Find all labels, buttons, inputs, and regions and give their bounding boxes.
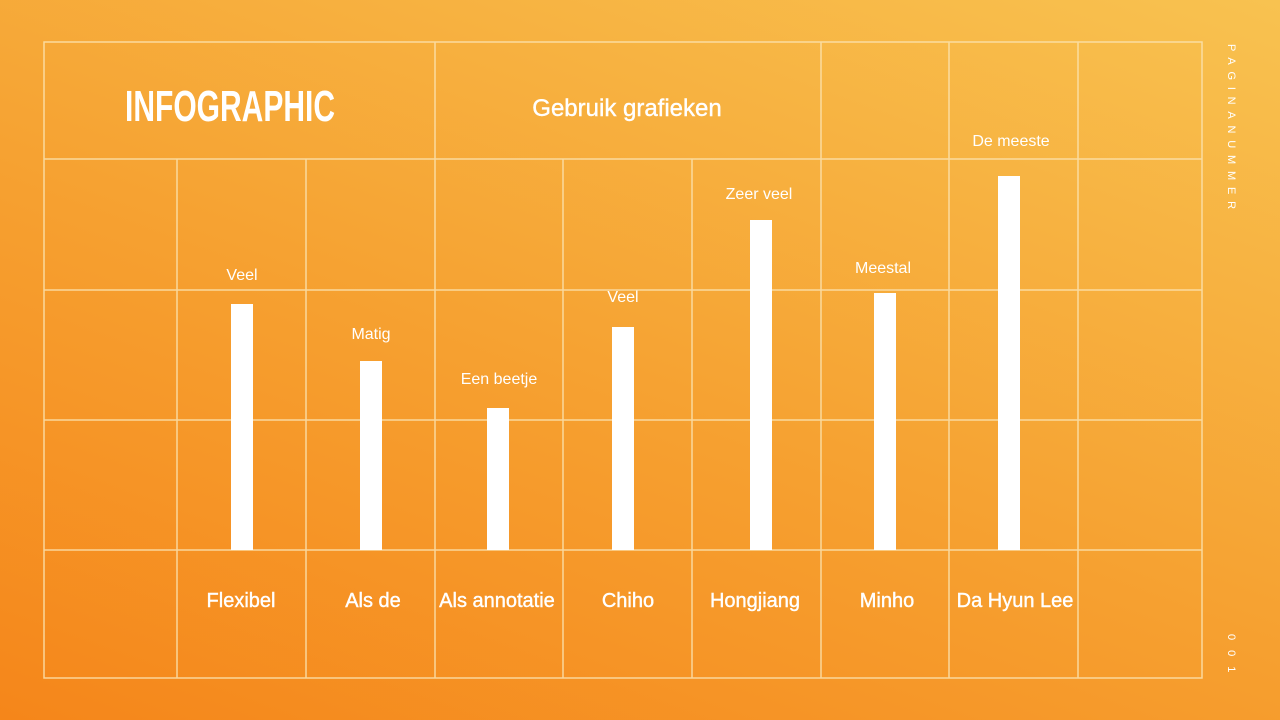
value labels [226, 133, 1050, 388]
title: INFOGRAPHIC [125, 82, 335, 131]
category labels [207, 590, 1073, 612]
category labels: Chiho [602, 590, 654, 612]
value labels: De meeste [972, 133, 1050, 150]
value labels: Veel [607, 289, 639, 306]
category labels: Als annotatie [439, 590, 555, 612]
bars [231, 176, 1020, 550]
value labels: Veel [226, 267, 258, 284]
value labels: Een beetje [461, 371, 537, 388]
category labels: Als de [345, 590, 401, 612]
value labels: Meestal [855, 260, 911, 277]
value labels: Zeer veel [726, 186, 792, 203]
category labels: Minho [860, 590, 914, 612]
value labels: Matig [351, 326, 391, 343]
category labels: Hongjiang [710, 590, 800, 612]
subtitle: Gebruik grafieken [532, 95, 722, 122]
page number: 001 [1225, 634, 1237, 682]
page label vertical: PAGINANUMMER [1225, 44, 1237, 216]
category labels: Flexibel [207, 590, 275, 612]
category labels: Da Hyun Lee [957, 590, 1073, 612]
